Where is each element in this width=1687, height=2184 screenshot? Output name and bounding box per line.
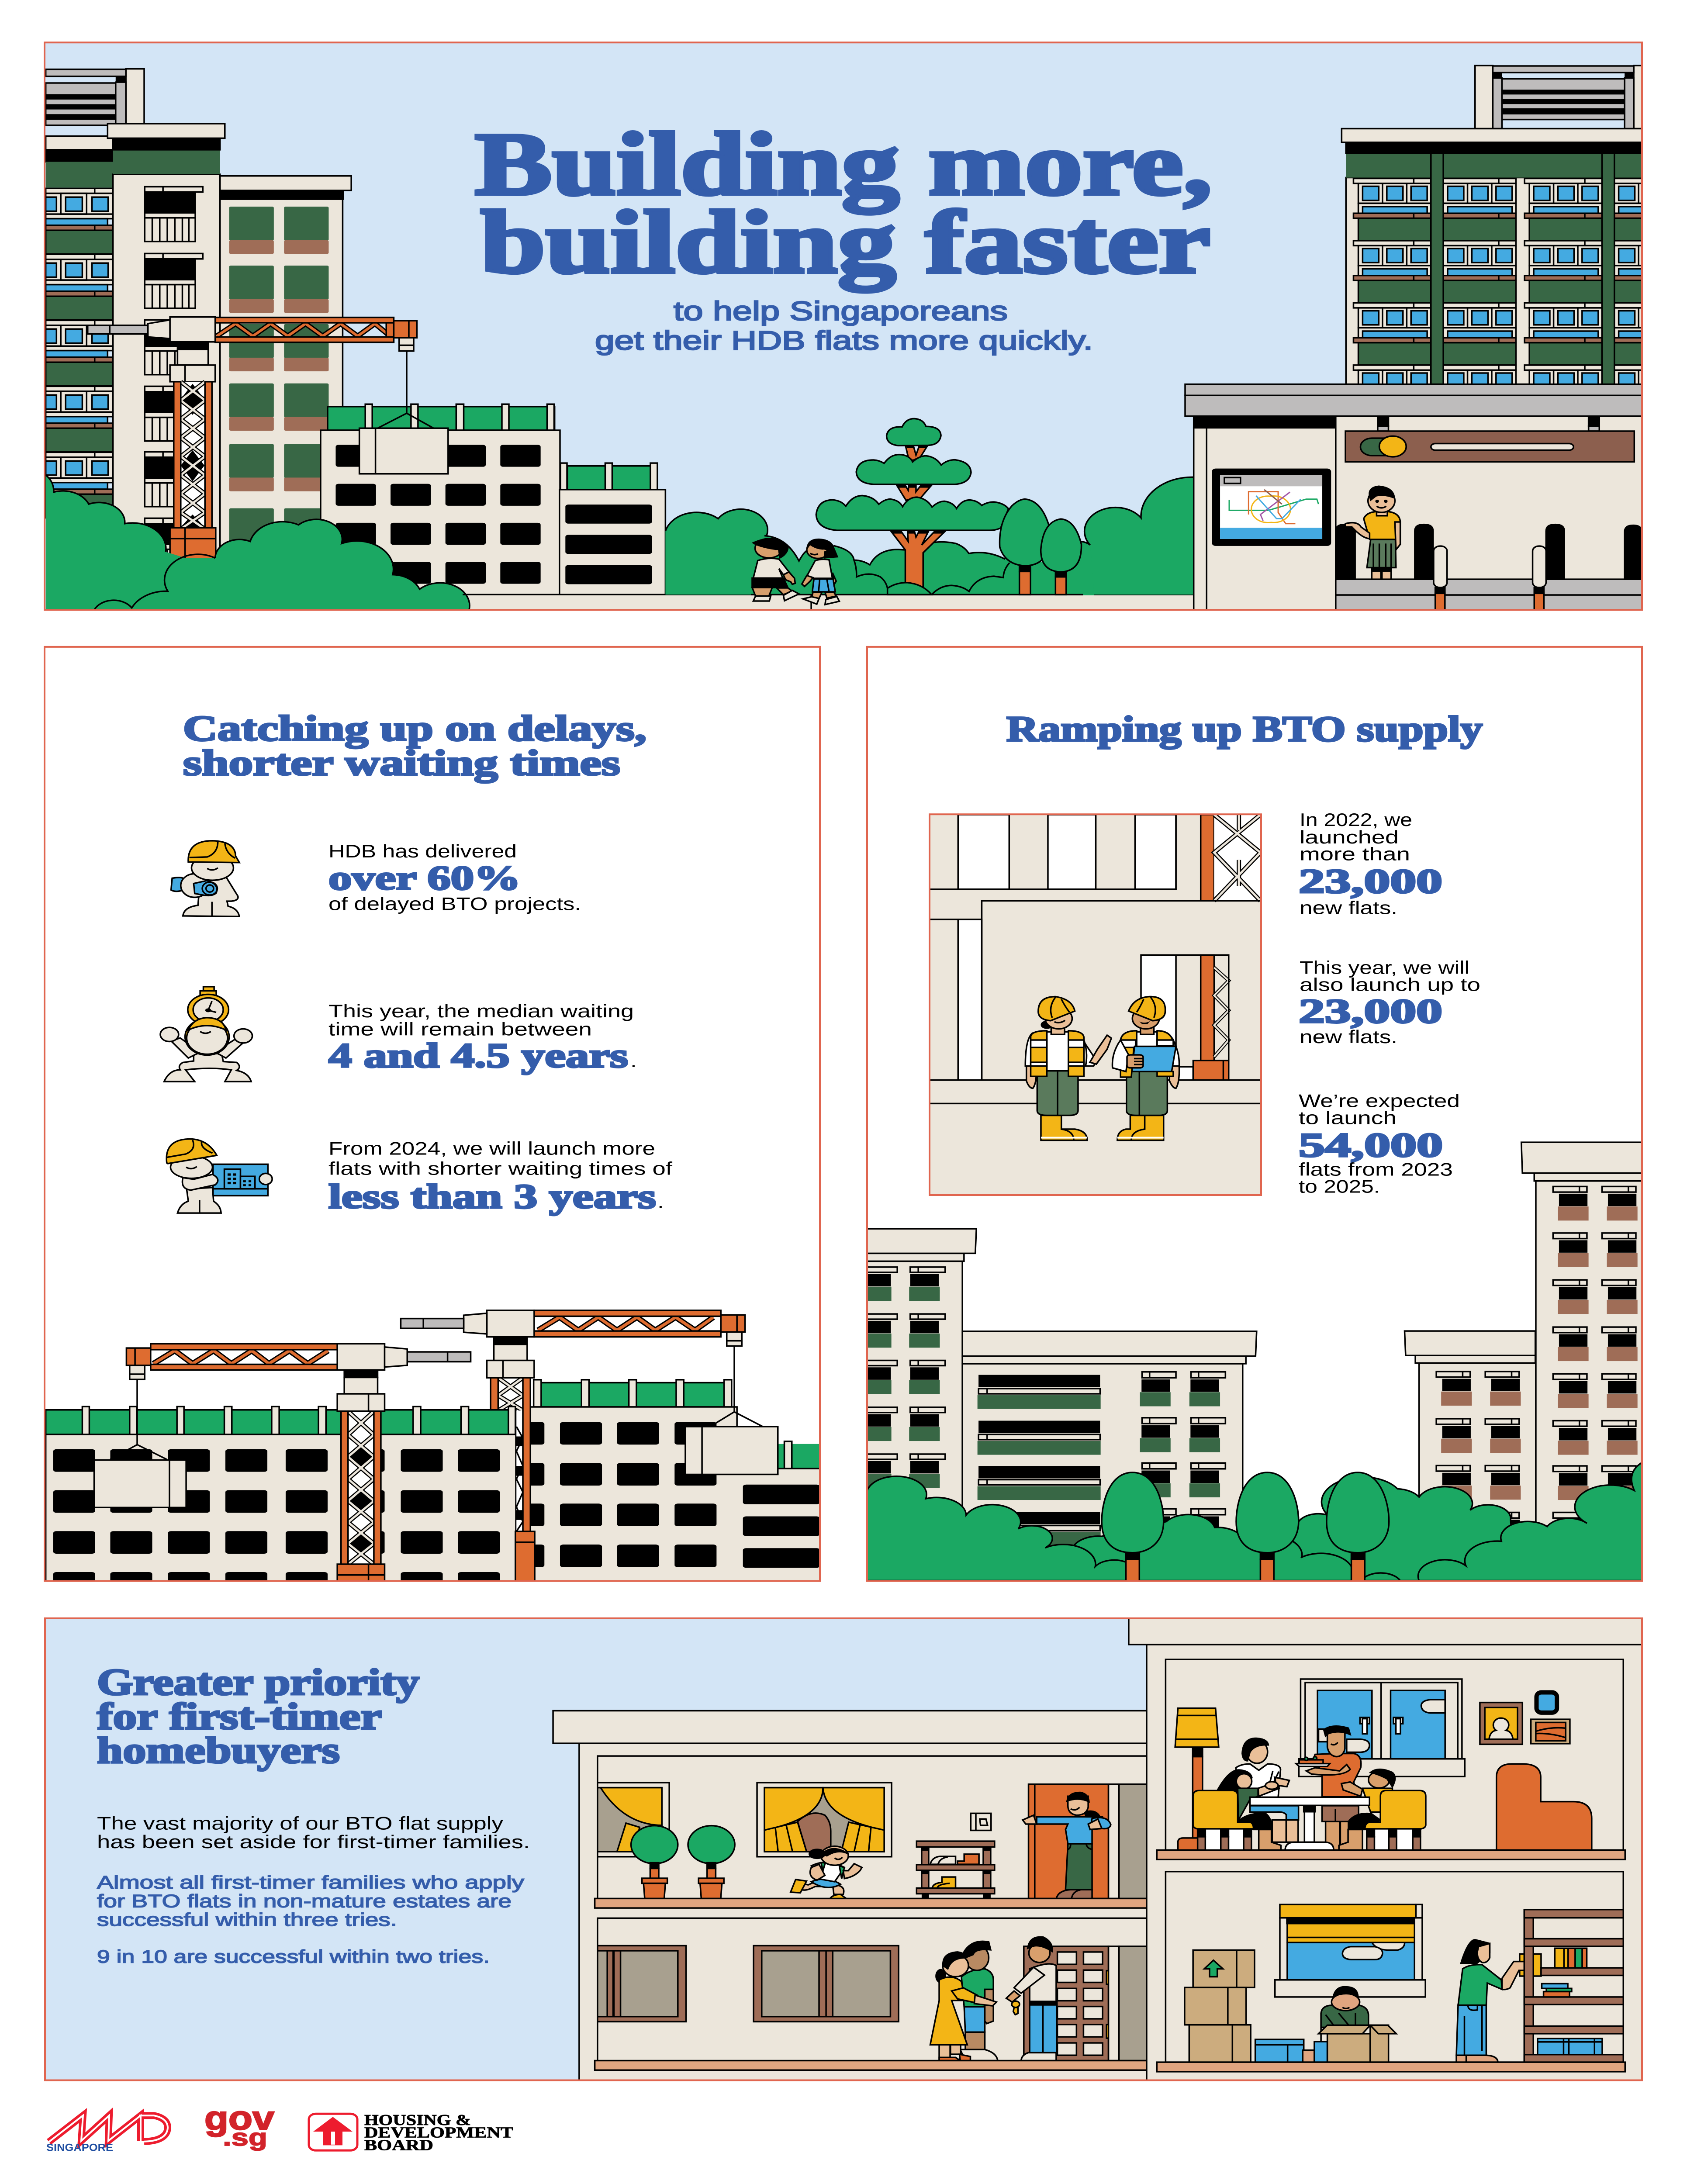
text: launched in 2022: more than	[1300, 844, 1410, 864]
text: launched in 2022: launched	[1300, 827, 1399, 847]
logo: gov.sg: gov	[204, 2099, 274, 2137]
text: success within three tries: for BTO flats in non-mature estates are	[97, 1891, 512, 1911]
text: shorter waiting times: From 2024, we will launch more	[328, 1139, 655, 1159]
text: supply set aside: The vast majority of our BTO flat supply	[97, 1814, 503, 1834]
text: launched in 2022	[1299, 810, 1442, 918]
panel background	[45, 1618, 1642, 2080]
logo: MND Singapore: SINGAPORE	[46, 2142, 113, 2153]
illustration: woman at the station	[1345, 486, 1400, 579]
text: over 60 percent: HDB has delivered	[328, 841, 517, 862]
text: median waiting time	[328, 1001, 637, 1075]
text: shorter waiting times: flats with shorter waiting times of	[328, 1159, 673, 1179]
panel: catching up on delays	[45, 647, 820, 1595]
logo: gov.sg: .sg	[223, 2124, 267, 2151]
heading: homebuyers	[97, 1730, 340, 1771]
illustration: two workers on site	[930, 814, 1261, 1195]
text: over 60 percent: over 60%	[328, 859, 521, 897]
heading: Greater priority	[97, 1662, 419, 1703]
panel: hero banner	[45, 42, 1687, 615]
icon: worker holding building plan	[166, 1139, 272, 1213]
text: launching this year	[1299, 958, 1480, 1047]
text: expected launches: We’re expected	[1299, 1091, 1460, 1111]
illustration: construction site with crane and low-rise block	[46, 69, 1027, 615]
illustration: park with pine tree, bushes and walking children	[751, 418, 1094, 605]
text: expected launches: 54,000	[1299, 1126, 1443, 1164]
text: launched in 2022: new flats.	[1300, 898, 1397, 918]
heading: Catching up on delays,	[183, 708, 646, 748]
illustration: HDB blocks and trees	[865, 1142, 1642, 1582]
logo: Housing and Development Board: DEVELOPMENT	[364, 2124, 513, 2141]
panel frame	[867, 647, 1642, 1581]
panel frame	[45, 647, 820, 1581]
text: supply set aside: has been set aside for first-timer families.	[97, 1832, 530, 1852]
text: nine in ten: 9 in 10 are successful within two tries.	[97, 1947, 490, 1967]
text: shorter waiting times: .	[657, 1192, 664, 1212]
panel frame	[45, 1618, 1642, 2080]
text: over 60 percent	[328, 841, 581, 914]
illustration: low-rise home interiors	[553, 1711, 1158, 2082]
illustration: station and apartment block	[811, 66, 1687, 615]
logo: MND Singapore	[46, 2115, 168, 2153]
text: launching this year: This year, we will	[1300, 958, 1469, 978]
heading: shorter waiting times	[183, 743, 620, 783]
illustration: tall home interiors with family	[1129, 1618, 1649, 2085]
subtitle: get their HDB flats more quickly.	[595, 325, 1093, 355]
heading: Ramping up BTO supply	[1006, 709, 1483, 749]
text: expected launches: to launch	[1299, 1108, 1397, 1128]
logo: Housing and Development Board: BOARD	[364, 2137, 433, 2153]
heading	[97, 1662, 419, 1771]
text: expected launches: flats from 2023	[1299, 1160, 1453, 1180]
logos footer	[46, 2099, 513, 2153]
title	[475, 114, 1212, 292]
text: median waiting time: time will remain between	[328, 1019, 592, 1040]
banner frame	[45, 42, 1642, 610]
logo: Housing and Development Board: HOUSING &	[364, 2112, 471, 2129]
text: launching this year: also launch up to	[1300, 975, 1480, 995]
text: median waiting time: .	[630, 1051, 637, 1071]
text: median waiting time: 4 and 4.5 years	[328, 1036, 628, 1075]
heading	[183, 708, 646, 783]
text: success within three tries: Almost all first-timer families who apply	[97, 1873, 524, 1893]
text: success within three tries: successful within three tries.	[97, 1910, 397, 1930]
sky background	[45, 42, 1642, 610]
panel: ramping up BTO supply	[865, 647, 1642, 1582]
text: supply set aside	[97, 1814, 530, 1852]
icon: worker lifting clock	[160, 987, 252, 1082]
title: building faster	[481, 192, 1210, 292]
panel background	[45, 647, 820, 1581]
subtitle: to help Singaporeans	[674, 296, 1008, 326]
text: success within three tries	[97, 1873, 524, 1930]
illustration: tower cranes over BTO blocks	[46, 1310, 820, 1595]
text: shorter waiting times	[328, 1139, 673, 1216]
heading: for first-timer	[97, 1696, 382, 1737]
logo: gov.sg	[204, 2099, 274, 2151]
panel: greater priority for first-timers	[45, 1618, 1649, 2085]
subtitle	[595, 296, 1093, 355]
text: expected launches: to 2025.	[1299, 1177, 1380, 1197]
inner picture frame	[930, 814, 1261, 1195]
text: launching this year: 23,000	[1299, 992, 1442, 1030]
text: expected launches	[1299, 1091, 1460, 1197]
text: launched in 2022: In 2022, we	[1300, 810, 1412, 830]
text: shorter waiting times: less than 3 years	[328, 1177, 656, 1216]
logo: Housing and Development Board	[309, 2112, 513, 2153]
icon: worker carrying rolled plans	[171, 841, 239, 916]
panel background	[867, 647, 1642, 1581]
text: launched in 2022: 23,000	[1299, 863, 1442, 900]
text: median waiting time: This year, the median waiting	[328, 1001, 634, 1022]
text: launching this year: new flats.	[1300, 1027, 1397, 1047]
title: Building more,	[475, 114, 1212, 214]
text: over 60 percent: of delayed BTO projects.	[328, 894, 581, 914]
